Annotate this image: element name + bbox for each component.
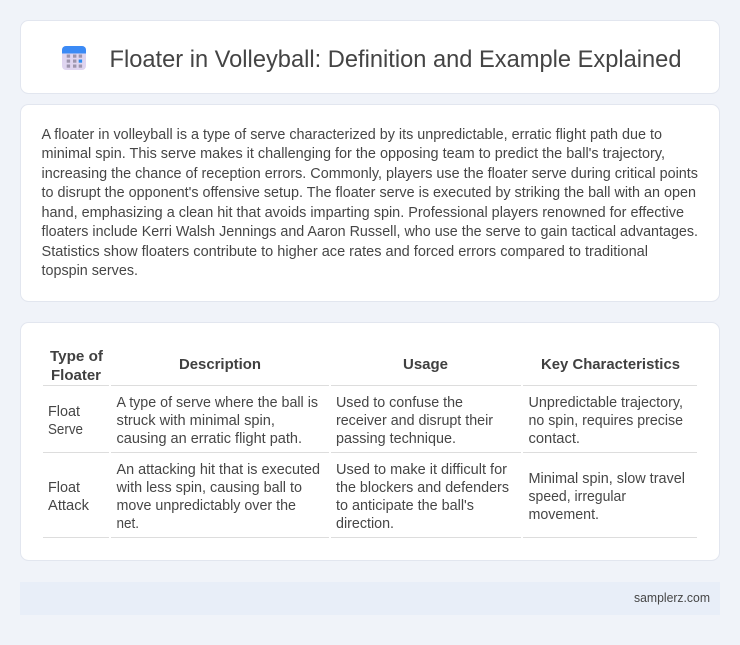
table row: float attack: Float (48, 480, 80, 496)
footer bar (20, 582, 720, 615)
table row: float attack: net. (116, 516, 139, 532)
paragraph text: minimal spin. This serve makes it challenging for the opposing team to predict the ball's trajectory, (42, 146, 665, 162)
title text: Floater in Volleyball: Definition and Example Explained (110, 46, 682, 73)
table row: float attack (48, 462, 685, 532)
table row: float attack: move unpredictably over the (116, 498, 296, 514)
table row: float attack: with less spin, causing ball to (116, 480, 302, 496)
paragraph text: to disrupt the opponent's offensive setup. The floater serve is executed by striking the ball with an open (42, 185, 696, 201)
table row: float serve: Used to confuse the (336, 395, 463, 411)
table row: float attack: An attacking hit that is executed (116, 462, 320, 478)
table row: float attack: direction. (336, 516, 394, 532)
table row: float attack: the blockers and defenders (336, 480, 509, 496)
footer source text: samplerz.com (634, 591, 710, 605)
table row: float attack: movement. (528, 507, 599, 523)
paragraph text: topspin serves. (42, 263, 138, 279)
table row: float attack: Used to make it difficult for (336, 462, 507, 478)
table row: float serve: struck with minimal spin, (116, 413, 275, 429)
table header: Floater (51, 367, 101, 384)
table row: float attack: to anticipate the ball's (336, 498, 474, 514)
paragraph text: hand, emphasizing a clean hit that avoids imparting spin. Professional players renowned for effective (42, 205, 684, 221)
table row: float serve: Unpredictable trajectory, (528, 395, 683, 411)
paragraph text: floaters include Kerri Walsh Jennings and Aaron Russell, who use the serve to gain tactical advantages. (42, 224, 698, 240)
table header: Key Characteristics (541, 356, 680, 373)
panel: title (20, 20, 720, 94)
table row: float attack: Minimal spin, slow travel (528, 471, 685, 487)
table row: float serve: Serve (48, 422, 83, 438)
table header (50, 348, 680, 384)
table row: float attack: Attack (48, 498, 90, 514)
paragraph text (42, 127, 698, 279)
table header: Description (179, 356, 261, 373)
icon: calendar (62, 46, 86, 70)
paragraph text: increasing the chance of reception errors. Commonly, players use the floater serve during critical points (42, 166, 698, 182)
table row: float serve: receiver and disrupt their (336, 413, 493, 429)
table row: float attack: speed, irregular (528, 489, 626, 505)
table row: float serve: contact. (528, 431, 580, 447)
table row: float serve: Float (48, 404, 80, 420)
table header: Usage (403, 356, 448, 373)
paragraph text: Statistics show floaters contribute to higher ace rates and forced errors compared to traditional (42, 244, 648, 260)
paragraph text: A floater in volleyball is a type of serve characterized by its unpredictable, erratic flight path due to (42, 127, 662, 143)
table row: float serve: passing technique. (336, 431, 456, 447)
panel: description paragraph (20, 104, 720, 302)
table row: float serve: A type of serve where the ball is (116, 395, 318, 411)
table row: float serve: causing an erratic flight path. (116, 431, 302, 447)
table header: Type of (50, 348, 104, 365)
panel: comparison table (20, 322, 720, 560)
table row: float serve: no spin, requires precise (528, 413, 683, 429)
table row: float serve (48, 395, 683, 447)
